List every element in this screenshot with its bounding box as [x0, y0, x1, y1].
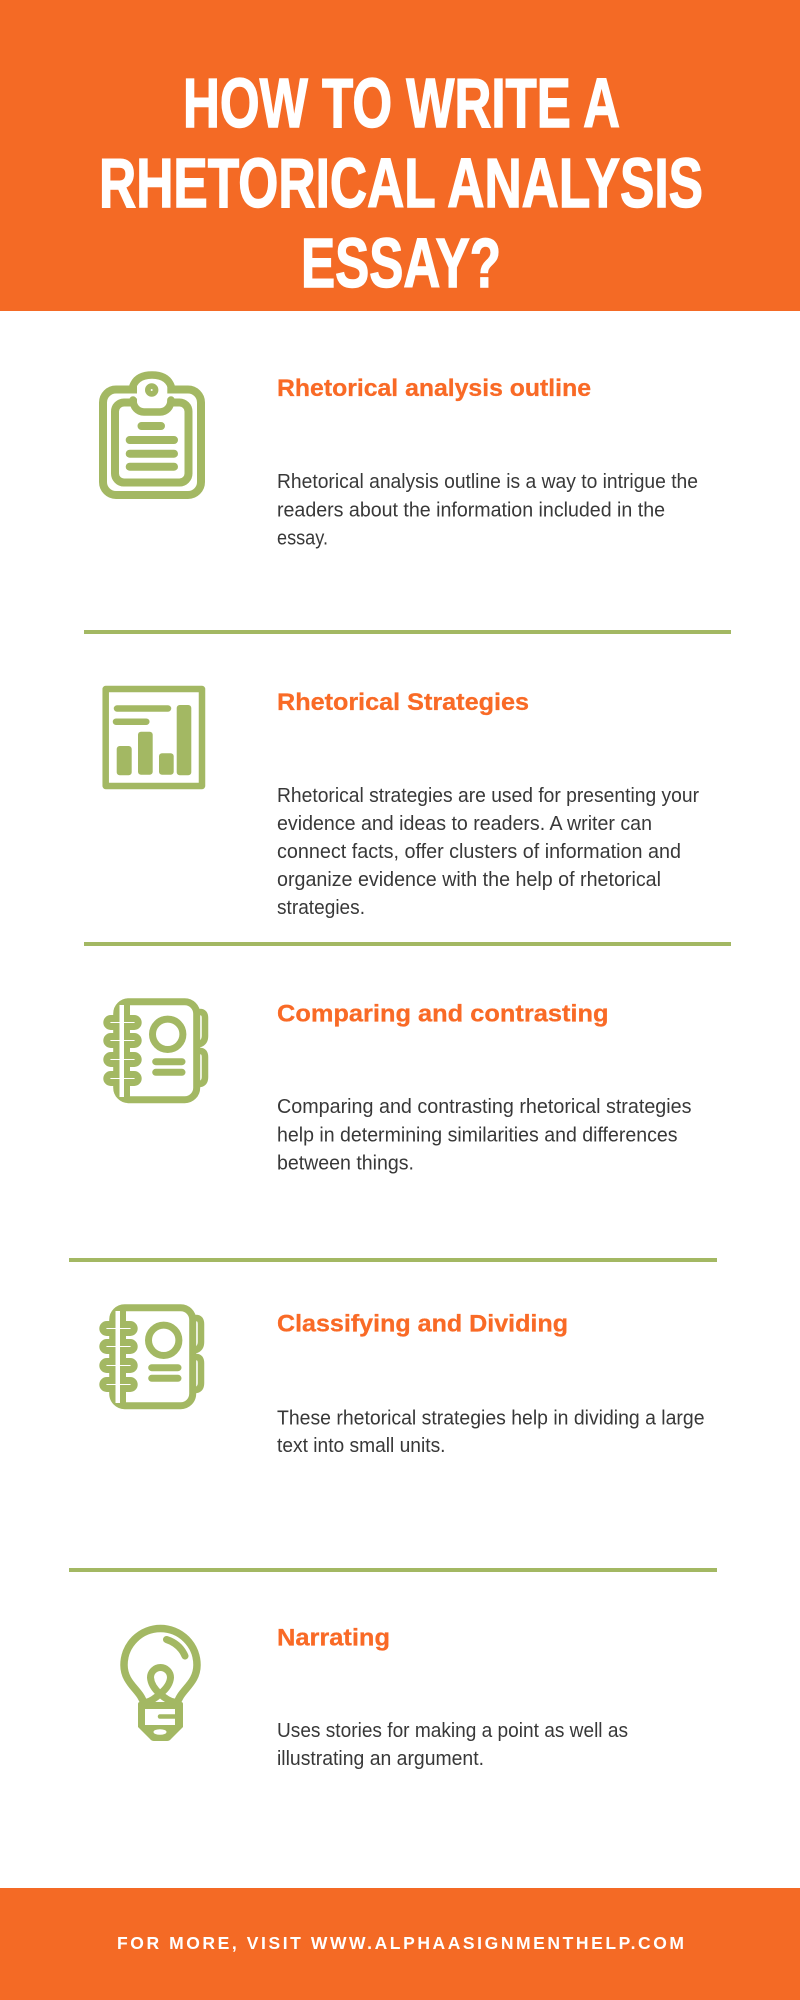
panel: classifying and dividing: [103, 1307, 705, 1457]
body text: organize evidence with the help of rhetorical: [277, 869, 661, 891]
body text: illustrating an argument.: [277, 1748, 484, 1770]
body text: These rhetorical strategies help in dividing a large: [277, 1408, 704, 1430]
header banner: [0, 0, 800, 311]
icon: notebook: [107, 1001, 205, 1100]
body text: Rhetorical strategies are used for presenting your: [277, 785, 699, 807]
title: HOW TO WRITE A: [183, 64, 620, 142]
icon: bar chart: [106, 689, 202, 786]
body text: strategies.: [277, 897, 365, 919]
body text: readers about the information included in the: [277, 500, 665, 522]
body text: Comparing and contrasting rhetorical strategies: [277, 1096, 692, 1118]
panel: comparing and contrasting: [107, 1000, 692, 1174]
title: ESSAY?: [301, 224, 501, 302]
title: [99, 64, 703, 302]
icon: clipboard: [103, 375, 201, 495]
body text: help in determining similarities and differences: [277, 1124, 678, 1146]
body text: connect facts, offer clusters of information and: [277, 841, 681, 863]
heading: Classifying and Dividing: [277, 1310, 568, 1338]
heading: Rhetorical analysis outline: [277, 375, 591, 402]
body text: Uses stories for making a point as well as: [277, 1720, 628, 1742]
body text: Rhetorical analysis outline is a way to intrigue the: [277, 471, 698, 493]
icon: light bulb: [124, 1629, 197, 1741]
panel: rhetorical strategies: [106, 689, 699, 919]
panel: rhetorical analysis outline: [103, 375, 698, 550]
panel: narrating: [124, 1624, 628, 1770]
body text: text into small units.: [277, 1435, 446, 1457]
footer banner: [0, 1888, 800, 2000]
heading: Narrating: [277, 1624, 390, 1652]
body text: [277, 1096, 692, 1174]
body text: [277, 1408, 704, 1457]
heading: Rhetorical Strategies: [277, 689, 529, 716]
body text: [277, 1720, 628, 1770]
body text: essay.: [277, 528, 328, 550]
body text: between things.: [277, 1152, 414, 1174]
body text: [277, 471, 698, 550]
footer text: FOR MORE, VISIT WWW.ALPHAASIGNMENTHELP.COM: [117, 1933, 684, 1953]
body text: evidence and ideas to readers. A writer can: [277, 813, 652, 835]
body text: [277, 785, 699, 919]
heading: Comparing and contrasting: [277, 1000, 608, 1028]
icon: notebook: [103, 1307, 201, 1406]
